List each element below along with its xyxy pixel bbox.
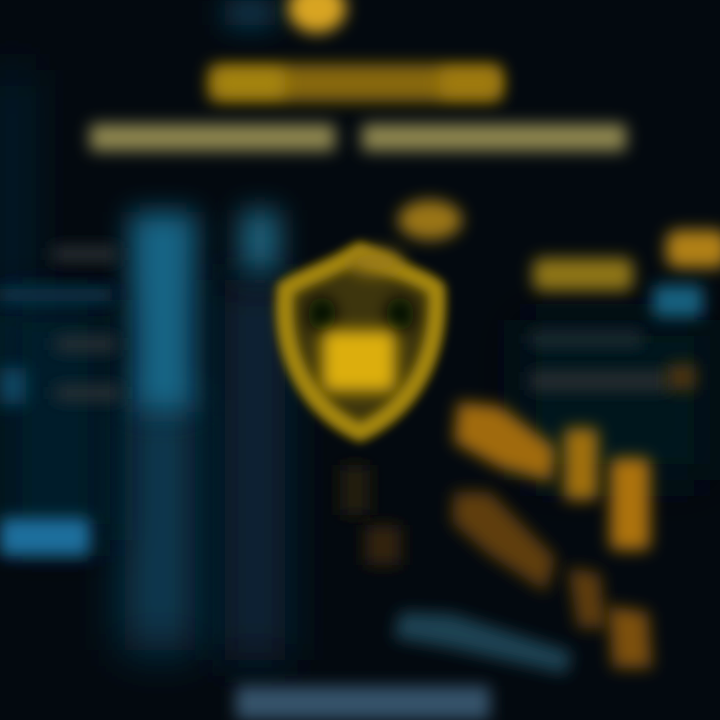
- right heading: [533, 230, 720, 317]
- left blue button: [0, 518, 90, 556]
- icon: gold shield: [283, 249, 438, 436]
- icon: small gold badge above shield: [398, 200, 462, 240]
- right text block: [530, 332, 696, 390]
- subtitle: [90, 124, 626, 151]
- chart: diagonal orange bars: [452, 402, 652, 668]
- footer: [236, 686, 490, 720]
- left text block: [0, 247, 121, 404]
- bottom right text: [394, 612, 572, 674]
- title: [208, 64, 502, 102]
- icon: top gold circle: [288, 0, 346, 33]
- center faded text: [340, 465, 401, 565]
